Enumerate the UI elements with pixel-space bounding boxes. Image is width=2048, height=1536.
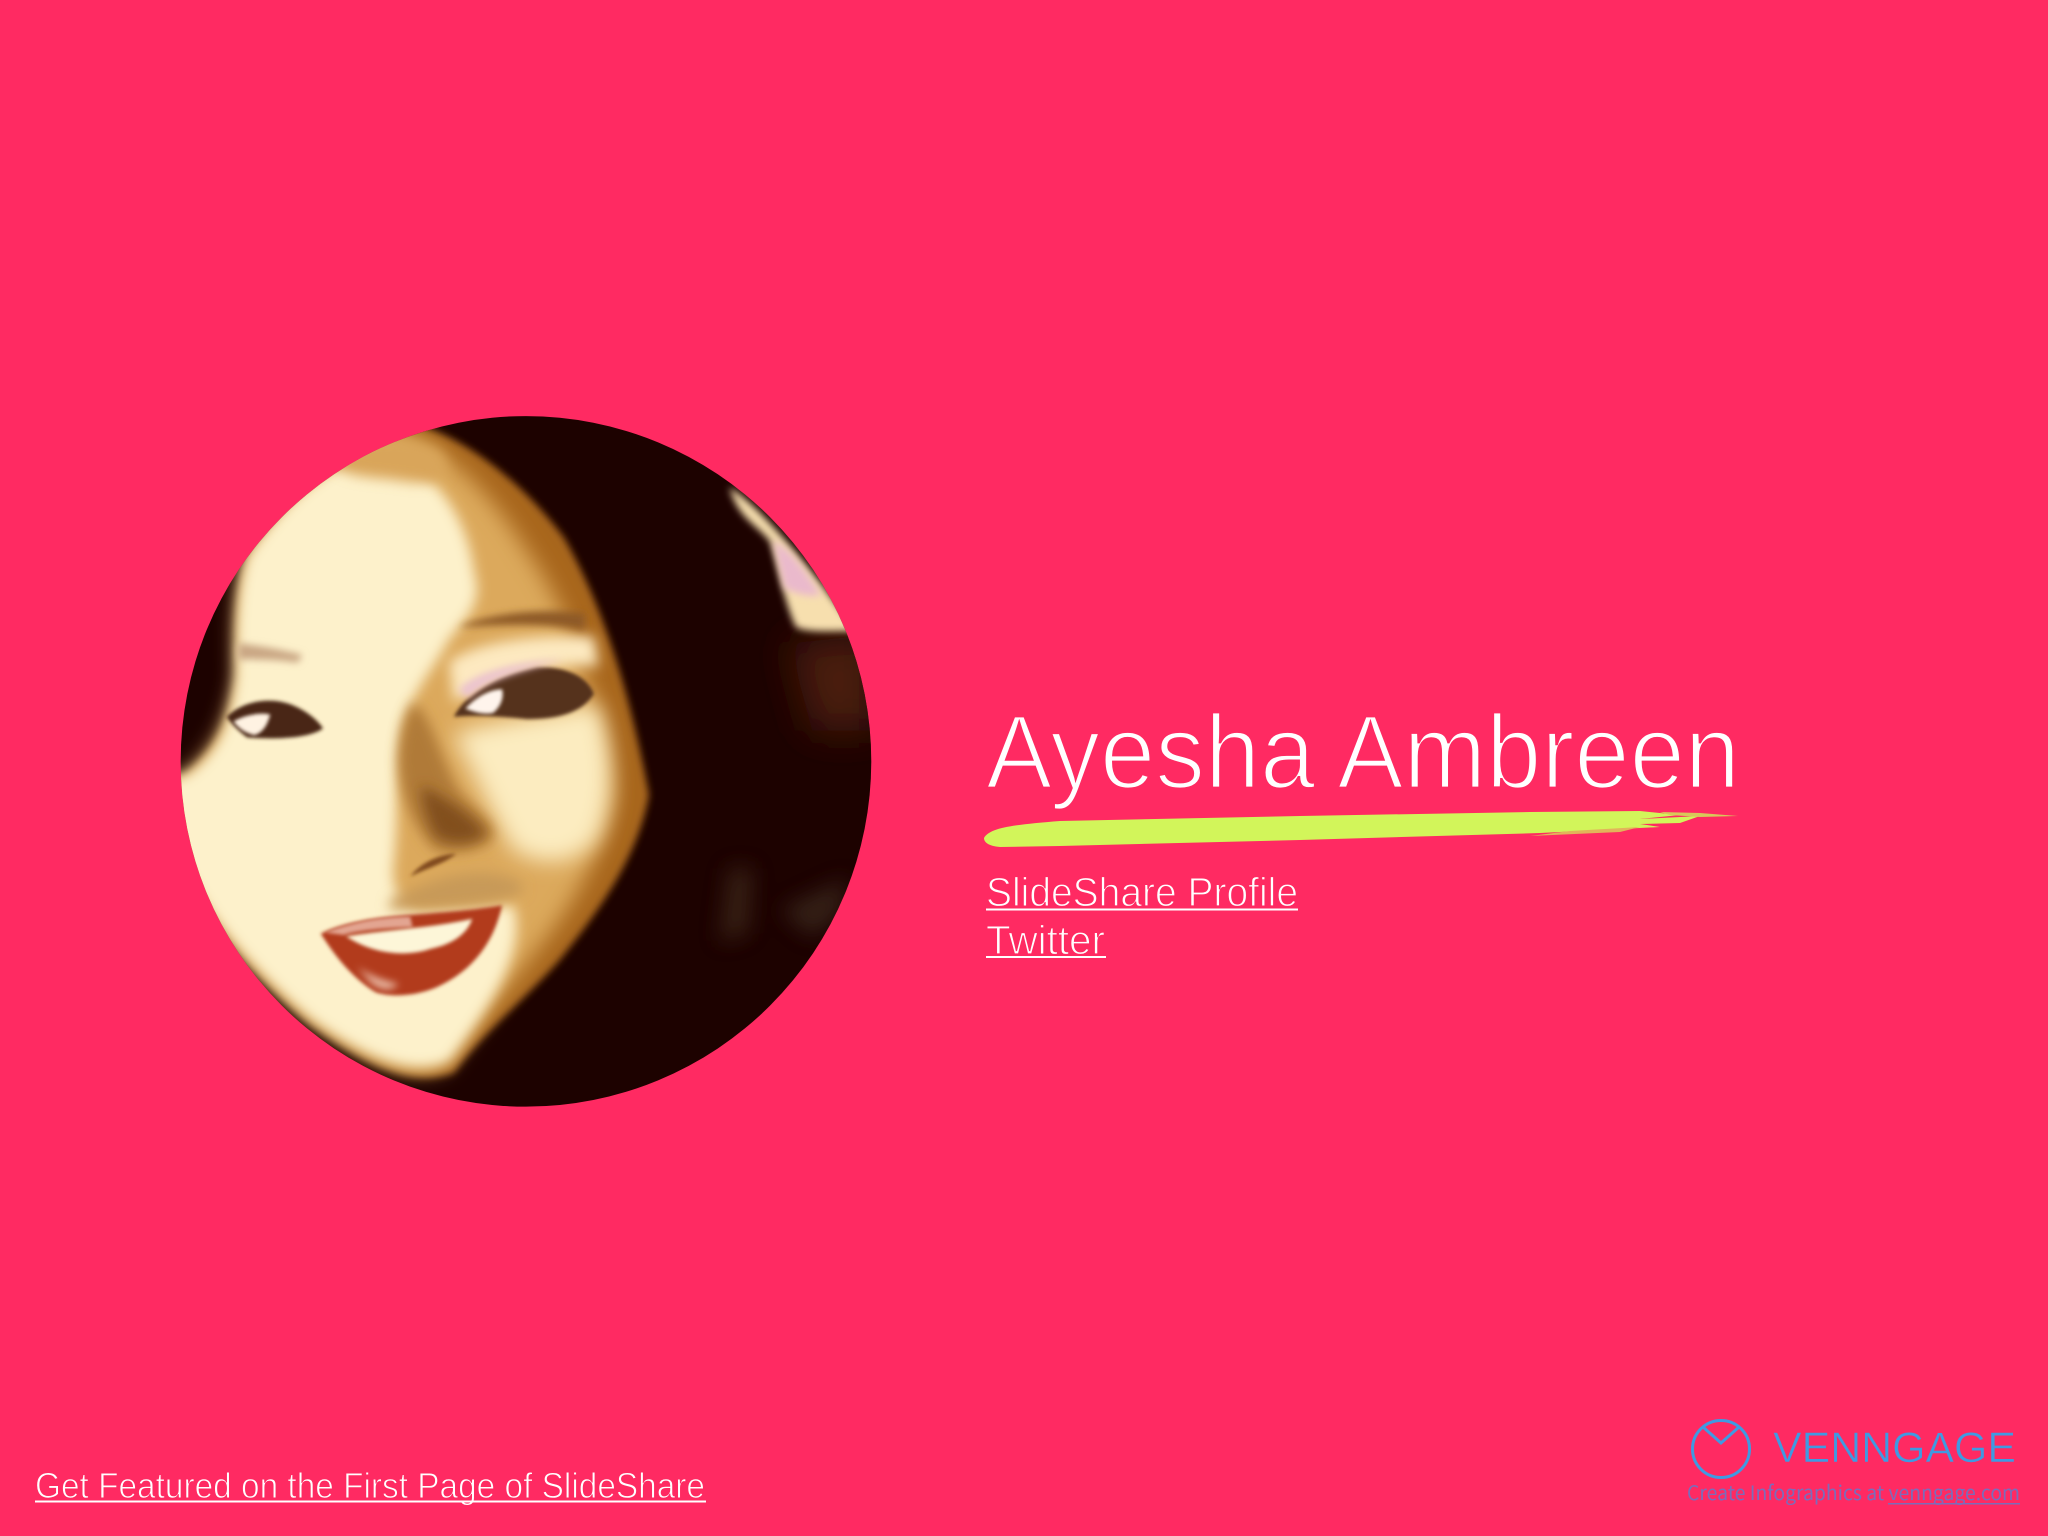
venngage logo icon xyxy=(1692,1420,1750,1478)
venngage tagline: Create Infographics at venngage.com xyxy=(1687,1477,2020,1506)
left eyebrow xyxy=(238,643,302,663)
nostril xyxy=(410,854,456,877)
skin highlight forehead and left cheek xyxy=(160,453,517,1067)
hair and dark backdrop xyxy=(180,416,872,1107)
face shape xyxy=(160,418,649,1077)
nose shadow xyxy=(399,703,493,852)
upper eyelid highlight xyxy=(449,636,599,703)
hair highlights lower right xyxy=(720,868,849,942)
forehead hairline shade xyxy=(330,438,447,483)
featured link: Get Featured on the First Page of SlideShare xyxy=(35,1465,705,1506)
venngage wordmark: VENNGAGE xyxy=(1773,1424,2016,1472)
name heading: Ayesha Ambreen xyxy=(986,694,1740,811)
twitter link: Twitter xyxy=(986,917,1105,963)
portrait photo in circle xyxy=(180,416,872,1107)
mouth xyxy=(321,905,502,995)
right eye xyxy=(454,659,594,719)
right cheek highlight xyxy=(454,703,610,861)
dark brown background patch xyxy=(789,634,876,731)
skin mid tone xyxy=(160,428,612,1072)
right eyebrow xyxy=(458,611,585,630)
green brush stroke xyxy=(984,811,1738,847)
slideshare profile link: SlideShare Profile xyxy=(986,869,1298,915)
background light top right xyxy=(729,487,858,632)
left eye xyxy=(227,701,323,738)
author profile slide xyxy=(35,416,2020,1505)
upper lip shadow xyxy=(390,873,523,910)
